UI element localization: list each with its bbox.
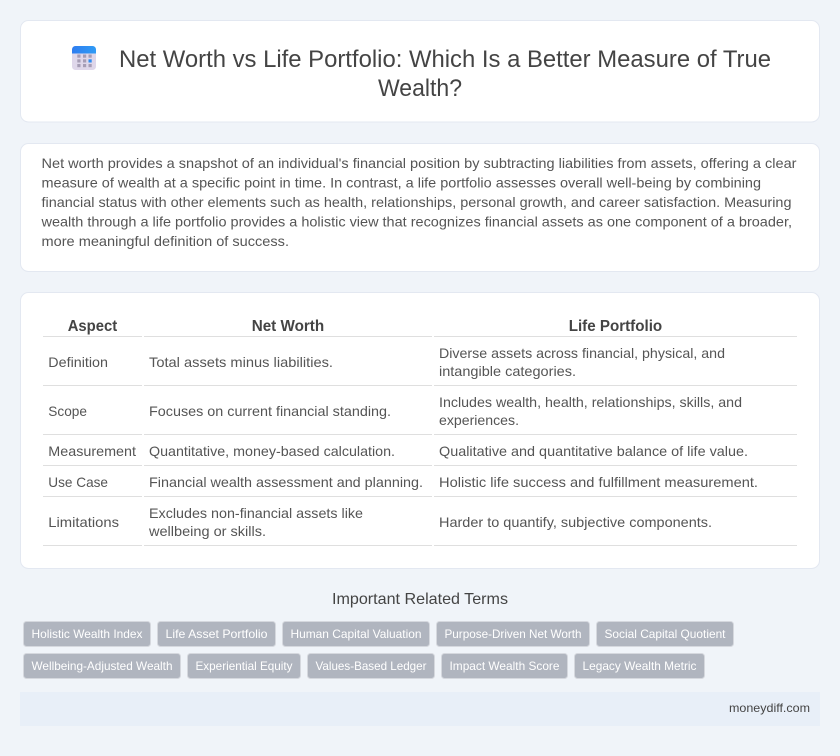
table row: Measurement: Quantitative, money-based calculation.: [149, 443, 395, 459]
text block: summary: measure of wealth at a specific point in time. In contrast, a life portfolio assesses overall well-being by combining: [42, 174, 761, 190]
table row: Scope: Focuses on current financial standing.: [149, 403, 391, 419]
panel: summary paragraph: [20, 144, 820, 272]
chip: [24, 622, 150, 646]
table header: Life Portfolio: [569, 318, 662, 335]
chip: [158, 622, 276, 646]
text block: summary: [40, 155, 797, 249]
table row: Measurement: Qualitative and quantitative balance of life value.: [439, 443, 748, 459]
table row: Scope: [43, 394, 797, 435]
chip: [596, 622, 734, 646]
chip: Experiential Equity: [196, 659, 292, 673]
table row: Use Case: Use Case: [48, 474, 108, 490]
chip: [436, 622, 590, 646]
text block: summary: Net worth provides a snapshot of an individual's financial position by subtracting liabilities from assets, offering a clear: [42, 155, 797, 171]
panel: comparison table: [20, 292, 820, 568]
chip: Human Capital Valuation: [290, 627, 422, 641]
table row: Limitations: Limitations: [48, 514, 119, 530]
chip: Purpose-Driven Net Worth: [444, 627, 582, 641]
chip: Life Asset Portfolio: [166, 627, 268, 641]
heading: related terms: Important Related Terms: [332, 591, 508, 608]
table row: Scope: Scope: [48, 403, 87, 419]
table row: Definition: [43, 345, 797, 386]
title: Wealth?: [378, 75, 462, 102]
table header: Net Worth: [252, 318, 324, 335]
table row: Limitations: wellbeing or skills.: [148, 523, 266, 539]
table row: Limitations: Excludes non-financial assets like: [149, 505, 363, 521]
footer bar: moneydiff.com: [729, 701, 810, 715]
chip: Wellbeing-Adjusted Wealth: [32, 659, 172, 673]
chip: [442, 654, 568, 678]
chip: Legacy Wealth Metric: [582, 659, 696, 673]
chip: [24, 654, 180, 678]
table row: Measurement: Measurement: [48, 443, 136, 459]
table row: Limitations: [43, 505, 797, 546]
table row: Limitations: Harder to quantify, subjective components.: [439, 514, 712, 530]
table row: Definition: Total assets minus liabilities.: [149, 354, 333, 370]
icon: calendar: [72, 46, 96, 70]
panel: related term chips: [24, 622, 734, 678]
table header: Aspect: [68, 318, 118, 335]
table row: Definition: Definition: [48, 354, 108, 370]
title: [119, 46, 771, 102]
text block: summary: more meaningful definition of success.: [42, 233, 289, 249]
title: Net Worth vs Life Portfolio: Which Is a Better Measure of True: [119, 46, 771, 73]
table header: [43, 318, 797, 337]
table row: Scope: experiences.: [439, 412, 519, 428]
table row: Use Case: Financial wealth assessment and planning.: [149, 474, 423, 490]
table row: Scope: Includes wealth, health, relationships, skills, and: [439, 394, 742, 410]
table row: Definition: Diverse assets across financial, physical, and: [439, 345, 725, 361]
table row: Definition: intangible categories.: [439, 363, 576, 379]
chip: Social Capital Quotient: [604, 627, 726, 641]
chip: [574, 654, 704, 678]
chip: [188, 654, 300, 678]
table row: Use Case: [43, 474, 797, 497]
text block: summary: wealth through a life portfolio provides a holistic view that recognizes financial assets as one component of a broader,: [40, 214, 792, 230]
panel: title card: [20, 20, 820, 122]
footer bar: [20, 692, 820, 726]
chip: Values-Based Ledger: [316, 659, 426, 673]
table row: Measurement: [43, 443, 797, 466]
table row: Use Case: Holistic life success and fulfillment measurement.: [439, 474, 758, 490]
chip: [308, 654, 434, 678]
chip: [282, 622, 430, 646]
chip: Impact Wealth Score: [450, 659, 560, 673]
text block: summary: financial status with other elements such as health, relationships, personal growth, and career satisfaction. Measuring: [42, 194, 792, 210]
chip: Holistic Wealth Index: [32, 627, 142, 641]
